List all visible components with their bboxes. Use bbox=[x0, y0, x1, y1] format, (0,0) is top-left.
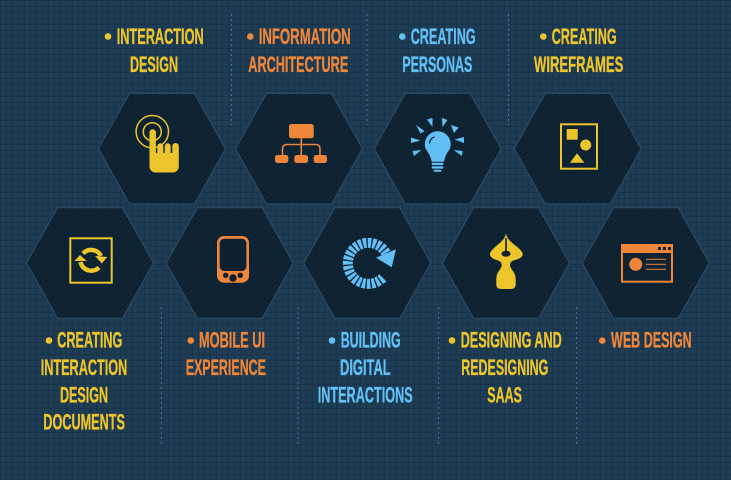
icon: wireframe bbox=[561, 124, 597, 169]
heading: creating personas: PERSONAS bbox=[402, 52, 472, 77]
heading: designing and redesigning SaaS: REDESIGNING bbox=[461, 355, 548, 380]
heading: creating wireframes: CREATING bbox=[552, 24, 617, 49]
hexagon bbox=[166, 208, 293, 318]
heading: mobile UI experience: MOBILE UI bbox=[199, 328, 265, 353]
heading: information architecture: ARCHITECTURE bbox=[248, 52, 348, 77]
panel: mobile UI experience bbox=[166, 208, 293, 380]
panel: creating wireframes bbox=[514, 24, 641, 204]
hexagon bbox=[582, 208, 709, 318]
icon: light bulb bbox=[411, 118, 464, 172]
icon: pen nib bbox=[490, 233, 523, 289]
heading: creating personas bbox=[399, 24, 476, 77]
heading: building digital interactions bbox=[318, 328, 413, 407]
heading: designing and redesigning SaaS bbox=[449, 328, 562, 407]
heading: creating interaction design documents bbox=[41, 328, 127, 434]
heading: building digital interactions: BUILDING bbox=[341, 328, 401, 353]
hexagon bbox=[26, 208, 154, 318]
heading: interaction design: INTERACTION bbox=[117, 24, 204, 49]
hexagon bbox=[374, 93, 501, 204]
heading: building digital interactions: INTERACTIONS bbox=[318, 382, 413, 407]
heading: mobile UI experience: EXPERIENCE bbox=[186, 355, 266, 380]
heading: building digital interactions: DIGITAL bbox=[340, 355, 391, 380]
heading: creating personas: CREATING bbox=[411, 24, 476, 49]
heading: creating interaction design documents: CREATING bbox=[57, 328, 122, 353]
panel: web design bbox=[582, 208, 709, 353]
hexagon bbox=[236, 93, 362, 204]
heading: creating interaction design documents: DESIGN bbox=[60, 382, 108, 407]
heading: information architecture bbox=[247, 24, 351, 77]
heading: creating wireframes bbox=[534, 24, 623, 77]
icon: tapping hand bbox=[136, 116, 179, 172]
heading: creating interaction design documents: INTERACTION bbox=[41, 355, 127, 380]
panel: designing and redesigning SaaS bbox=[442, 208, 570, 407]
panel: creating interaction design documents bbox=[26, 208, 154, 434]
panel: information architecture bbox=[236, 24, 362, 204]
heading: web design bbox=[599, 328, 692, 353]
panel: creating personas bbox=[374, 24, 501, 204]
icon: sync document bbox=[70, 238, 112, 283]
hexagon bbox=[514, 93, 641, 204]
icon: circular arrow bbox=[348, 243, 396, 284]
icon: mobile device bbox=[217, 236, 249, 283]
heading: mobile UI experience bbox=[186, 328, 266, 380]
heading: information architecture: INFORMATION bbox=[259, 24, 351, 49]
hexagon bbox=[304, 208, 431, 318]
heading: creating wireframes: WIREFRAMES bbox=[534, 52, 623, 77]
heading: designing and redesigning SaaS: DESIGNING AND bbox=[461, 328, 562, 353]
icon: org chart bbox=[275, 124, 327, 163]
heading: interaction design: DESIGN bbox=[130, 52, 178, 77]
panel: interaction design bbox=[98, 24, 226, 204]
heading: designing and redesigning SaaS: SAAS bbox=[487, 382, 522, 407]
icon: browser window bbox=[621, 244, 673, 282]
heading: interaction design bbox=[105, 24, 204, 77]
hexagon bbox=[442, 208, 570, 318]
hexagon bbox=[98, 93, 226, 204]
heading: creating interaction design documents: DOCUMENTS bbox=[43, 409, 125, 434]
panel: building digital interactions bbox=[304, 208, 431, 407]
